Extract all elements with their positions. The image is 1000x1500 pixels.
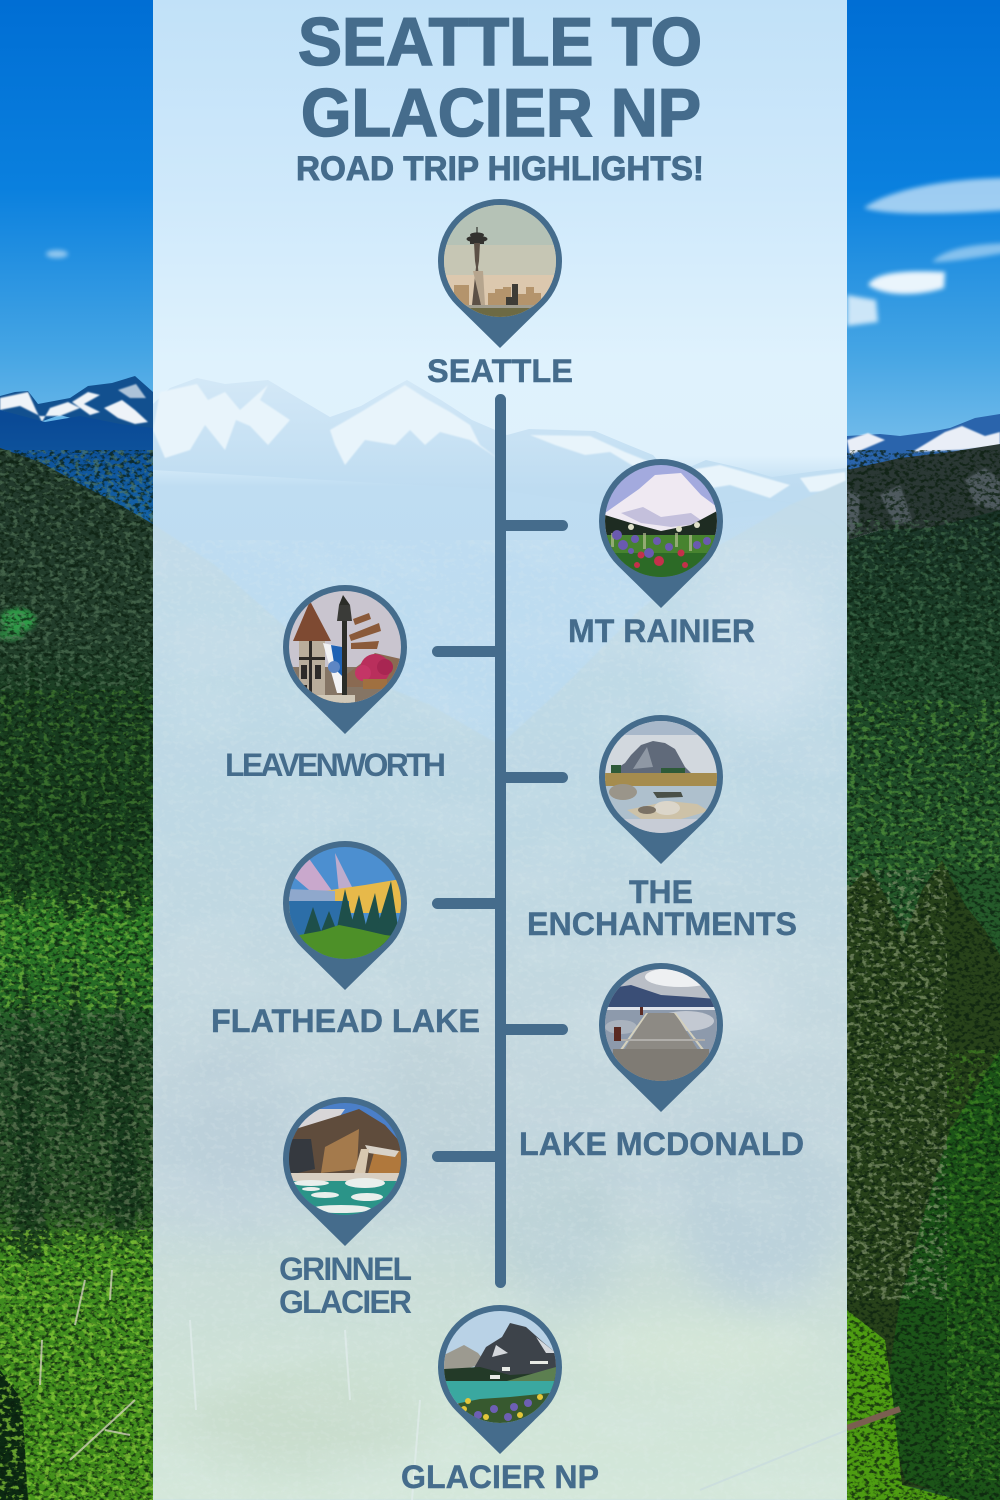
right snowy peaks (847, 414, 1000, 470)
foliage texture light: mid slopes (0, 690, 153, 890)
panel mottling (153, 540, 847, 1500)
left conifer row (0, 655, 153, 1260)
foliage texture light: grey conifers (0, 1010, 153, 1230)
pin: Seattle skyline photo (438, 199, 562, 348)
panel base sky (153, 0, 847, 1500)
left snowy peaks (0, 376, 153, 430)
foliage texture dark (0, 450, 1000, 1500)
panel faded branches (190, 1320, 847, 1500)
panel snowy range (153, 378, 847, 477)
stop: Flathead Lake (211, 841, 480, 1039)
label: Seattle: SEATTLE (427, 353, 573, 389)
bright patches (0, 608, 36, 641)
subtitle: ROAD TRIP HIGHLIGHTS! (296, 150, 704, 188)
pin: Glacier NP photo (438, 1305, 562, 1454)
foliage texture light: bright band (0, 890, 153, 1010)
label: The Enchantments: ENCHANTMENTS (527, 906, 797, 942)
stop: Leavenworth (225, 585, 446, 783)
clouds (46, 178, 1000, 326)
foliage texture light: right trees (847, 870, 947, 1300)
label: Grinnel Glacier: GLACIER (279, 1284, 412, 1320)
right rocky ridge (847, 444, 1000, 540)
pin: Leavenworth village photo (283, 585, 407, 734)
foliage texture light: bright lower left (0, 1230, 153, 1500)
stop: Seattle (427, 199, 573, 389)
pin: Lake McDonald dock photo (599, 963, 723, 1112)
label: The Enchantments: THE (629, 874, 693, 910)
stop: Mt Rainier (568, 459, 755, 649)
left forest (0, 448, 153, 1500)
pin: Flathead Lake photo (283, 841, 407, 990)
fallen log (847, 1409, 900, 1428)
panel snow patches (153, 384, 847, 498)
stop: Glacier NP (401, 1305, 599, 1495)
foliage texture light: upper slopes (0, 450, 153, 690)
right ground (847, 1310, 960, 1500)
left lower dark corner (0, 1370, 28, 1500)
label: Lake McDonald: LAKE MCDONALD (519, 1126, 804, 1162)
title (296, 4, 704, 188)
stop: Grinnel Glacier (279, 1097, 412, 1320)
left blue slope (0, 410, 153, 540)
label: Grinnel Glacier (279, 1251, 412, 1320)
right forest (847, 510, 1000, 1500)
pin: The Enchantments photo (599, 715, 723, 864)
label: The Enchantments (527, 874, 797, 942)
right big conifers (847, 860, 1000, 1500)
panel: translucent white column (153, 0, 847, 1500)
stop: Lake McDonald (519, 963, 804, 1162)
panel forested slopes (153, 480, 847, 1500)
title line 1: SEATTLE TO (298, 4, 702, 80)
label: Leavenworth: LEAVENWORTH (225, 747, 446, 783)
stop: The Enchantments (527, 715, 797, 942)
pin: Grinnel Glacier photo (283, 1097, 407, 1246)
pin: Mt Rainier photo (599, 459, 723, 608)
label: Flathead Lake: FLATHEAD LAKE (211, 1003, 480, 1039)
sky (0, 0, 1000, 470)
label: Grinnel Glacier: GRINNEL (279, 1251, 412, 1287)
panel soft tree shadows (210, 576, 818, 1458)
title line 2: GLACIER NP (301, 75, 701, 151)
timeline route line with branches (432, 394, 568, 1288)
label: Mt Rainier: MT RAINIER (568, 613, 755, 649)
label: Glacier NP: GLACIER NP (401, 1459, 599, 1495)
pale branches (40, 1270, 135, 1460)
